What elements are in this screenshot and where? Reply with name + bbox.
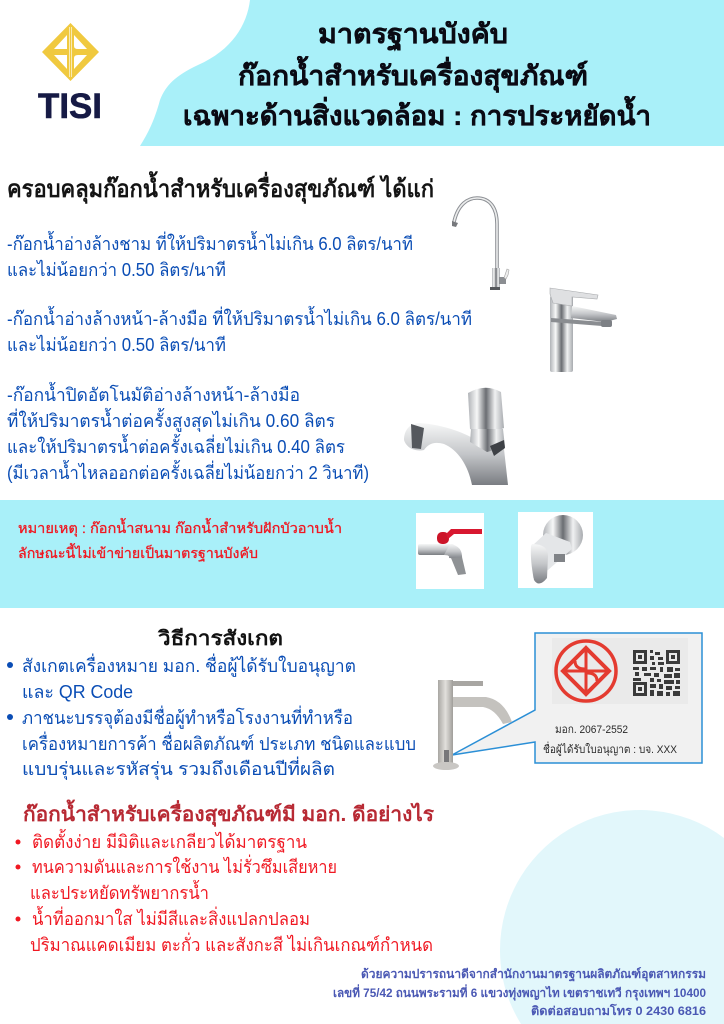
logo wordmark: TISI	[38, 87, 102, 126]
benefits list: น้ำที่ออกมาใส ไม่มีสีและสิ่งแปลกปลอม	[32, 906, 310, 929]
callout: mark label: ชื่อผู้ได้รับใบอนุญาต : บจ. XXX	[543, 741, 678, 756]
note text: หมายเหตุ : ก๊อกน้ำสนาม ก๊อกน้ำสำหรับฝักบัวอาบน้ำ	[18, 518, 342, 537]
title: ก๊อกน้ำสำหรับเครื่องสุขภัณฑ์	[238, 55, 588, 93]
label image background	[552, 638, 688, 704]
note band	[0, 500, 724, 608]
icon: steel faucet	[433, 680, 512, 770]
note text	[18, 518, 342, 562]
title: เฉพาะด้านสิ่งแวดล้อม : การประหยัดน้ำ	[183, 95, 651, 131]
coverage list text: และไม่น้อยกว่า 0.50 ลิตร/นาที	[7, 259, 226, 280]
how to check list: ภาชนะบรรจุต้องมีชื่อผู้ทำหรือโรงงานที่ทำหรือ	[22, 705, 353, 729]
footer credit: ด้วยความปรารถนาดีจากสำนักงานมาตรฐานผลิตภัณฑ์อุตสาหกรรม	[361, 967, 706, 982]
note text: ลักษณะนี้ไม่เข้าข่ายเป็นมาตรฐานบังคับ	[18, 543, 258, 562]
callout: mark label	[452, 633, 702, 763]
benefits heading: ก๊อกน้ำสำหรับเครื่องสุขภัณฑ์มี มอก. ดีอย่างไร	[23, 799, 434, 827]
footer credit	[333, 967, 706, 1018]
how to check list: แบบรุ่นและรหัสรุ่น รวมถึงเดือนปีที่ผลิต	[22, 756, 335, 780]
how to check list: เครื่องหมายการค้า ชื่อผลิตภัณฑ์ ประเภท ชนิดและแบบ	[22, 731, 416, 754]
header teal panel	[140, 0, 724, 146]
benefits list: และประหยัดทรัพยากรน้ำ	[30, 880, 209, 903]
icon: gooseneck kitchen faucet	[452, 198, 509, 290]
coverage list text	[7, 231, 472, 483]
coverage list text: (มีเวลาน้ำไหลออกต่อครั้งเฉลี่ยไม่น้อยกว่า 2 วินาที)	[7, 460, 369, 483]
benefits list	[16, 829, 433, 955]
photo: shower valve	[518, 512, 593, 588]
coverage list text: และให้ปริมาตรน้ำต่อครั้งเฉลี่ยไม่เกิน 0.40 ลิตร	[7, 434, 345, 457]
TISI logo	[38, 23, 102, 126]
coverage heading: ครอบคลุมก๊อกน้ำสำหรับเครื่องสุขภัณฑ์ ได้แก่	[7, 170, 434, 205]
coverage list text: ที่ให้ปริมาตรน้ำต่อครั้งสูงสุดไม่เกิน 0.60 ลิตร	[7, 408, 335, 432]
coverage list text: -ก๊อกน้ำอ่างล้างชาม ที่ให้ปริมาตรน้ำไม่เกิน 6.0 ลิตร/นาที	[7, 231, 413, 254]
coverage list text: -ก๊อกน้ำปิดอัตโนมัติอ่างล้างหน้า-ล้างมือ	[7, 382, 300, 405]
icon: self-closing faucet	[404, 388, 508, 485]
footer credit: เลขที่ 75/42 ถนนพระรามที่ 6 แขวงทุ่งพญาไท เขตราชเทวี กรุงเทพฯ 10400	[333, 984, 706, 1001]
how to check heading: วิธีการสังเกต	[157, 627, 283, 650]
how to check list: สังเกตเครื่องหมาย มอก. ชื่อผู้ได้รับใบอนุญาต	[22, 653, 356, 677]
benefits list: ทนความดันและการใช้งาน ไม่รั่วซึมเสียหาย	[32, 854, 337, 877]
footer credit: ติดต่อสอบถามโทร 0 2430 6816	[531, 1003, 706, 1018]
QR code	[633, 650, 680, 696]
photo: garden tap	[416, 513, 484, 589]
title: มาตรฐานบังคับ	[318, 19, 508, 52]
logo mark	[42, 23, 99, 81]
how to check list	[7, 653, 416, 780]
how to check list: และ QR Code	[22, 682, 133, 702]
label text: มอก. 2067-2552	[555, 724, 628, 736]
coverage list text: และไม่น้อยกว่า 0.50 ลิตร/นาที	[7, 334, 226, 355]
benefits list: ปริมาณแคดเมียม ตะกั่ว และสังกะสี ไม่เกินเกณฑ์กำหนด	[30, 932, 433, 955]
coverage list text: -ก๊อกน้ำอ่างล้างหน้า-ล้างมือ ที่ให้ปริมาตรน้ำไม่เกิน 6.0 ลิตร/นาที	[7, 306, 472, 329]
icon: basin mixer faucet	[550, 288, 617, 372]
title	[183, 19, 651, 131]
benefits list: ติดตั้งง่าย มีมิติและเกลียวได้มาตรฐาน	[32, 829, 307, 853]
bottom right circle decoration	[500, 810, 724, 1024]
red TIS mark	[556, 641, 616, 701]
